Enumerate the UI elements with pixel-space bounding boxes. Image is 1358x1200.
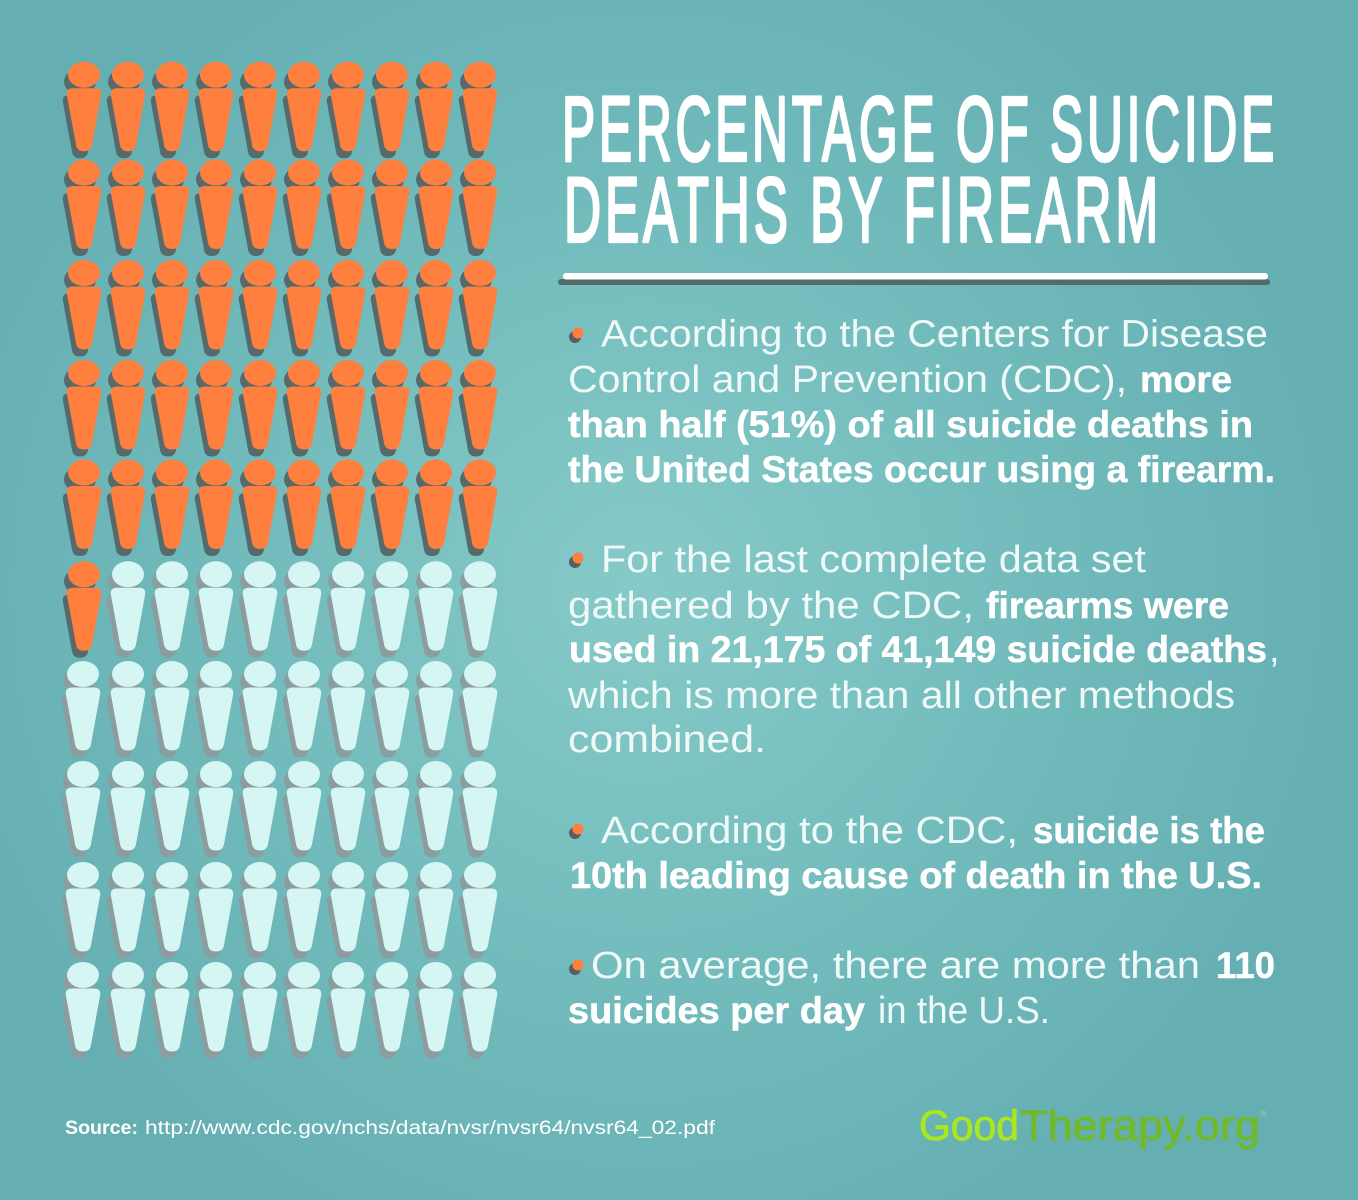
row 3 of people: all orange <box>63 260 497 356</box>
pictogram: 100 people, 51 highlighted <box>62 62 497 1058</box>
bullet <box>569 960 584 975</box>
text block: 21,175 of 41,149: gathered by the CDC, <box>568 585 974 627</box>
text block: 110 suicides per day: 110 <box>1216 945 1275 986</box>
text block: CDC 51 percent: than half (51%) of all suicide deaths in <box>568 404 1253 445</box>
bullet <box>569 552 584 568</box>
text block: 21,175 of 41,149: , <box>1269 629 1280 671</box>
row 9 of people: all light <box>62 862 497 958</box>
source line: Source: <box>65 1118 138 1139</box>
logo: GoodTherapy.org: Good <box>919 1102 1019 1150</box>
text block: 10th leading cause: According to the CDC, <box>601 810 1018 852</box>
row 5 of people: all orange <box>63 460 497 556</box>
text block: CDC 51 percent: Control and Prevention (CDC), <box>568 359 1127 401</box>
text block: 21,175 of 41,149: combined. <box>568 719 766 761</box>
text block: 10th leading cause: 10th leading cause of death in the U.S. <box>570 855 1262 896</box>
row 4 of people: all orange <box>63 360 497 456</box>
text block: CDC 51 percent: the United States occur using a firearm. <box>568 449 1275 490</box>
row 2 of people: all orange <box>63 160 497 256</box>
text block: 10th leading cause <box>569 810 1265 896</box>
text block: 110 suicides per day: in the U.S. <box>878 990 1050 1032</box>
text block: 21,175 of 41,149: which is more than all other methods <box>567 675 1235 717</box>
title divider rule <box>558 273 1270 285</box>
text block: 21,175 of 41,149: firearms were <box>986 585 1229 626</box>
text block: 10th leading cause: suicide is the <box>1033 810 1265 851</box>
text block: CDC 51 percent: According to the Centers for Disease <box>601 314 1268 356</box>
text block: 21,175 of 41,149: For the last complete data set <box>601 539 1146 581</box>
text block: CDC 51 percent <box>568 314 1275 490</box>
source line: http://www.cdc.gov/nchs/data/nvsr/nvsr64/nvsr64_02.pdf <box>145 1118 716 1139</box>
logo: GoodTherapy.org <box>919 1102 1267 1150</box>
row 10 of people: all light <box>62 962 497 1058</box>
title <box>562 78 1278 262</box>
bullet <box>569 328 584 343</box>
bullet <box>569 824 584 839</box>
row 8 of people: all light <box>62 761 497 858</box>
row 1 of people: all orange <box>63 62 497 158</box>
row 7 of people: all light <box>62 661 497 758</box>
row 6 of people: one orange, nine light <box>63 561 497 658</box>
text block: CDC 51 percent: more <box>1140 359 1232 400</box>
text block: 21,175 of 41,149 <box>567 539 1280 761</box>
text block: 21,175 of 41,149: used in 21,175 of 41,149 suicide deaths <box>569 629 1267 670</box>
logo: GoodTherapy.org: ® <box>1261 1110 1267 1118</box>
text block: 110 suicides per day: On average, there are more than <box>591 945 1200 987</box>
text block: 110 suicides per day: suicides per day <box>568 990 865 1031</box>
text block: 110 suicides per day <box>568 945 1275 1032</box>
logo: GoodTherapy.org: Therapy.org <box>1020 1102 1260 1150</box>
